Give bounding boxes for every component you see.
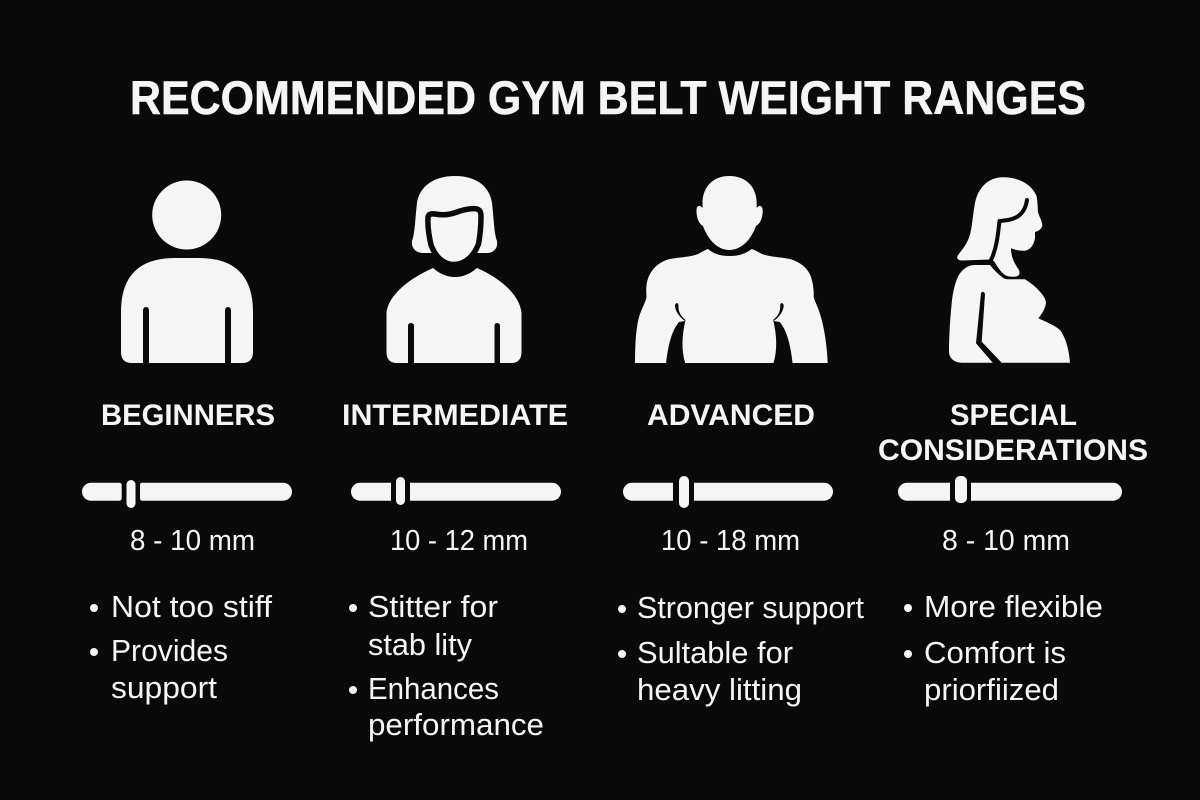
heading: beginners: BEGINNERS — [101, 399, 275, 432]
bullet list: beginners: support — [111, 670, 217, 705]
bullet list: beginners: Not too stiff — [111, 589, 272, 624]
panel: intermediate — [342, 176, 568, 742]
heading: advanced: ADVANCED — [647, 399, 815, 432]
bullet list: advanced — [618, 590, 864, 707]
range: beginners: 8 - 10 mm — [130, 525, 255, 557]
heading: special considerations — [878, 399, 1148, 467]
heading: special considerations: SPECIAL — [950, 399, 1077, 432]
bullet list: advanced: heavy litting — [637, 672, 802, 707]
belt: beginners — [82, 480, 292, 508]
panel: beginners — [82, 180, 292, 705]
bullet list: intermediate: performance — [368, 707, 544, 742]
bullet list: beginners: Provides — [111, 633, 228, 668]
bullet list: advanced: Sultable for — [637, 635, 793, 670]
bullet list: intermediate: stab lity — [368, 627, 472, 662]
belt: advanced — [623, 476, 833, 508]
bullet list: advanced: Stronger support — [637, 590, 864, 625]
icon: pregnant woman — [949, 177, 1070, 363]
bullet list: intermediate: Enhances — [368, 671, 499, 706]
bullet list: special considerations — [904, 589, 1103, 707]
bullet list: intermediate — [349, 589, 544, 742]
icon: intermediate person — [386, 176, 522, 363]
bullet list: beginners — [90, 589, 272, 705]
icon: advanced person — [635, 176, 828, 364]
bullet list: special considerations: priorfiized — [924, 672, 1059, 707]
heading: intermediate: INTERMEDIATE — [342, 399, 568, 432]
range: advanced: 10 - 18 mm — [661, 525, 800, 557]
range: intermediate: 10 - 12 mm — [390, 525, 528, 557]
bullet list: special considerations: More flexible — [924, 589, 1103, 624]
range: special considerations: 8 - 10 mm — [942, 525, 1070, 557]
panel: special considerations — [878, 177, 1148, 707]
icon: beginner person — [121, 180, 253, 363]
bullet list: intermediate: Stitter for — [368, 589, 498, 624]
bullet list: special considerations: Comfort is — [924, 635, 1066, 670]
panel: advanced — [618, 176, 864, 707]
belt: intermediate — [351, 477, 561, 505]
heading: special considerations: CONSIDERATIONS — [878, 434, 1148, 467]
title: RECOMMENDED GYM BELT WEIGHT RANGES — [130, 71, 1086, 124]
belt: special considerations — [898, 476, 1122, 503]
